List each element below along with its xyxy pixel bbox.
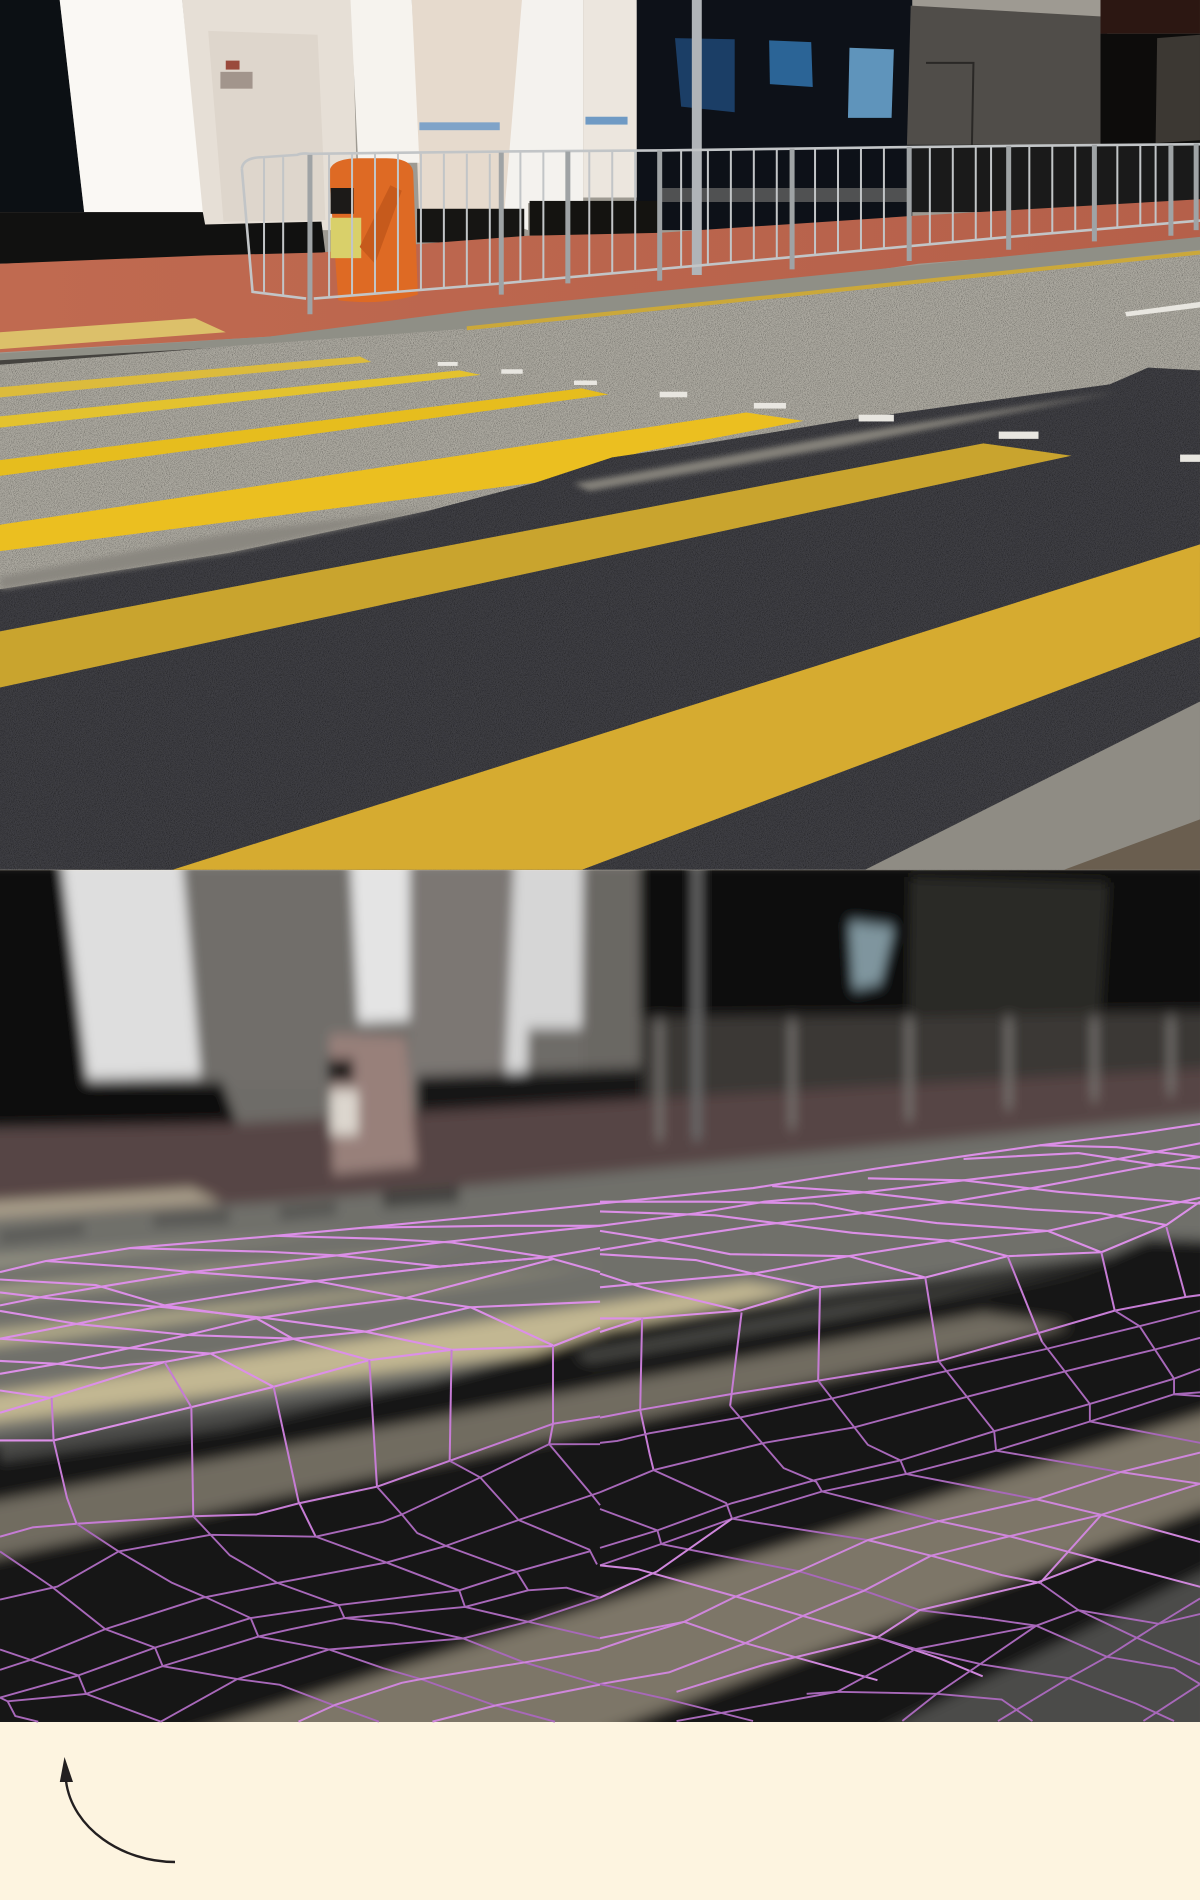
surface mesh: left half bbox=[0, 1204, 600, 1722]
blurred bin bbox=[329, 1034, 417, 1174]
blurred pavement bbox=[0, 1068, 1200, 1219]
blurred pole bbox=[693, 860, 701, 1141]
stripes in shade bbox=[0, 443, 1200, 870]
pavement bbox=[0, 199, 1200, 352]
mesh fold lines left bbox=[0, 1346, 600, 1537]
tactile paving bbox=[0, 318, 226, 349]
blurred shadow bbox=[0, 1238, 1200, 1735]
arrow: curved pointer up-left bbox=[60, 1757, 175, 1862]
mesh upper lines left bbox=[0, 1204, 600, 1440]
stripes in sunlight bbox=[0, 356, 804, 551]
panel: blurred photo with surface mesh bbox=[0, 860, 1200, 1740]
surface mesh: right half bbox=[600, 1124, 1200, 1721]
mesh dark lower right bbox=[600, 1583, 1200, 1721]
kerb bbox=[0, 237, 1200, 362]
tree shadow on asphalt bbox=[0, 368, 1200, 870]
building facade bbox=[0, 0, 1200, 264]
mesh upper lines right bbox=[600, 1124, 1200, 1332]
mesh bright lower lines left bbox=[299, 1650, 600, 1722]
mesh lit lower lines right bbox=[600, 1453, 1200, 1692]
mesh shaded lines right bbox=[600, 1311, 1200, 1618]
lit streaks bbox=[0, 508, 436, 589]
kerb and concrete at bottom right bbox=[865, 701, 1200, 870]
blurred, desaturated photo bbox=[0, 860, 1200, 1740]
panel: street photo bbox=[0, 0, 1200, 870]
metal fence bbox=[242, 144, 1200, 314]
mesh shaded lines left bbox=[0, 1444, 600, 1722]
blurred road bbox=[0, 1113, 1200, 1735]
asphalt road lit bbox=[0, 251, 1200, 595]
road studs bbox=[438, 302, 1200, 462]
mesh fold lines right bbox=[600, 1227, 1200, 1470]
blurred shaded stripes bbox=[0, 1313, 1071, 1562]
blurred concrete bbox=[884, 1565, 1200, 1722]
orange litter bin bbox=[329, 158, 418, 302]
street pole bbox=[692, 0, 702, 275]
blurred sunlit stripes bbox=[0, 1238, 248, 1271]
